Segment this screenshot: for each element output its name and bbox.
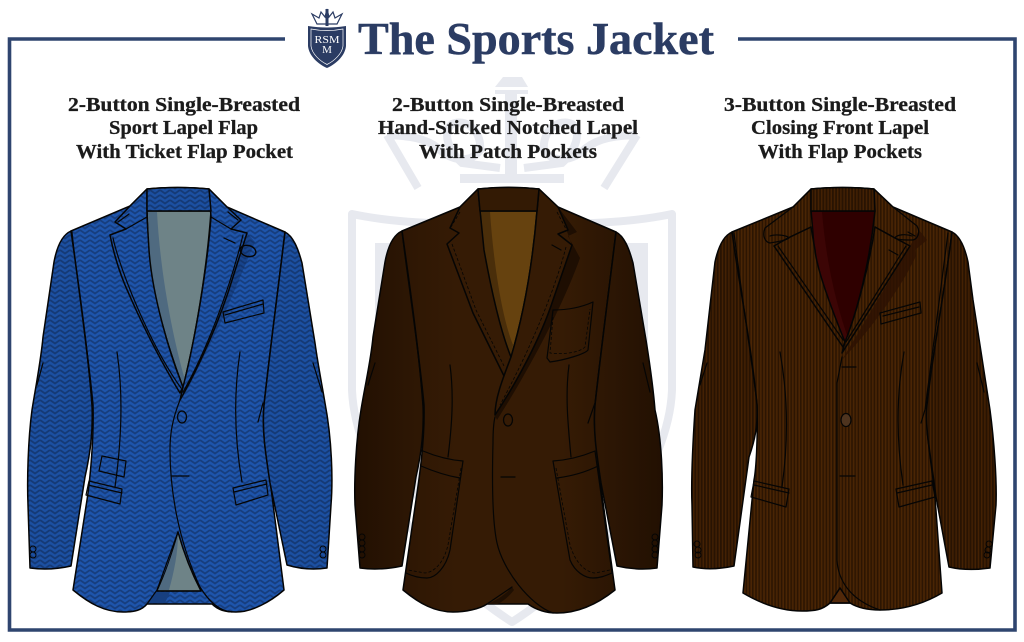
lining (811, 211, 875, 342)
heading: jacket 3 (724, 94, 956, 163)
right patch pocket (553, 451, 612, 578)
heading: jacket 2: 2-Button Single-Breasted (392, 94, 624, 116)
collar band (147, 188, 211, 211)
lower lining (487, 587, 514, 604)
heading: jacket 3: Closing Front Lapel (751, 117, 929, 139)
sleeves (692, 232, 996, 569)
breast patch pocket (547, 302, 593, 362)
sleeves (355, 231, 662, 569)
right lapel (180, 189, 247, 400)
buttons and holes (841, 414, 851, 426)
sleeves (28, 231, 332, 569)
chest button and hole (504, 414, 512, 426)
body (732, 188, 952, 611)
cuff buttons (30, 546, 326, 558)
heading: jacket 1: With Ticket Flap Pocket (76, 141, 293, 163)
heading: jacket 3: With Flap Pockets (758, 141, 922, 163)
left lapel (110, 189, 183, 393)
lapel shadow (181, 233, 255, 400)
lapel edge stitching and gorge (113, 212, 243, 392)
body (402, 188, 616, 613)
hand-stitching (451, 212, 566, 405)
front edges, seams and darts (700, 233, 984, 610)
cuff buttons (359, 534, 658, 558)
collar band (478, 188, 539, 211)
left lapel (774, 227, 845, 347)
lapel shadow (842, 230, 927, 360)
lapel flower loop (239, 244, 257, 258)
right lapel (842, 227, 910, 353)
body (71, 188, 285, 612)
chest button and hole (178, 411, 186, 423)
jacket 1: blue herringbone (28, 188, 332, 612)
hip pockets (751, 481, 935, 507)
lining bottom (157, 532, 201, 591)
collar band (811, 188, 875, 211)
front edges, seams and darts (37, 232, 322, 612)
breast ticket pocket (223, 300, 264, 323)
front edges, seams and darts (368, 232, 650, 613)
title: The Sports Jacket (358, 13, 715, 64)
heading: jacket 3: 3-Button Single-Breasted (724, 94, 956, 116)
heading: jacket 2: Hand-Sticked Notched Lapel (378, 117, 638, 139)
lapel shadow (495, 207, 580, 420)
left lapel (447, 189, 511, 378)
lining top (147, 211, 211, 387)
heading: jacket 1: 2-Button Single-Breasted (68, 94, 300, 116)
heading: jacket 2: With Patch Pockets (419, 141, 597, 163)
heading: jacket 1: Sport Lapel Flap (109, 117, 258, 139)
hip pockets (86, 456, 268, 505)
jacket 3: brown corduroy (692, 188, 996, 611)
logo: crest: M (322, 44, 332, 56)
right lapel (495, 189, 572, 415)
jacket 2: dark brown (355, 188, 662, 613)
watermark: shield and crown (352, 77, 672, 622)
breast pocket (880, 302, 921, 324)
cuff buttons (694, 541, 992, 558)
lower lining (830, 588, 850, 603)
logo: crest: RSM (314, 34, 340, 46)
heading: jacket 2 (378, 94, 638, 163)
lining (480, 211, 537, 357)
heading: jacket 1 (68, 94, 300, 163)
left patch pocket (406, 451, 463, 578)
logo: crest (308, 9, 346, 68)
collar and lapel details (764, 189, 919, 342)
